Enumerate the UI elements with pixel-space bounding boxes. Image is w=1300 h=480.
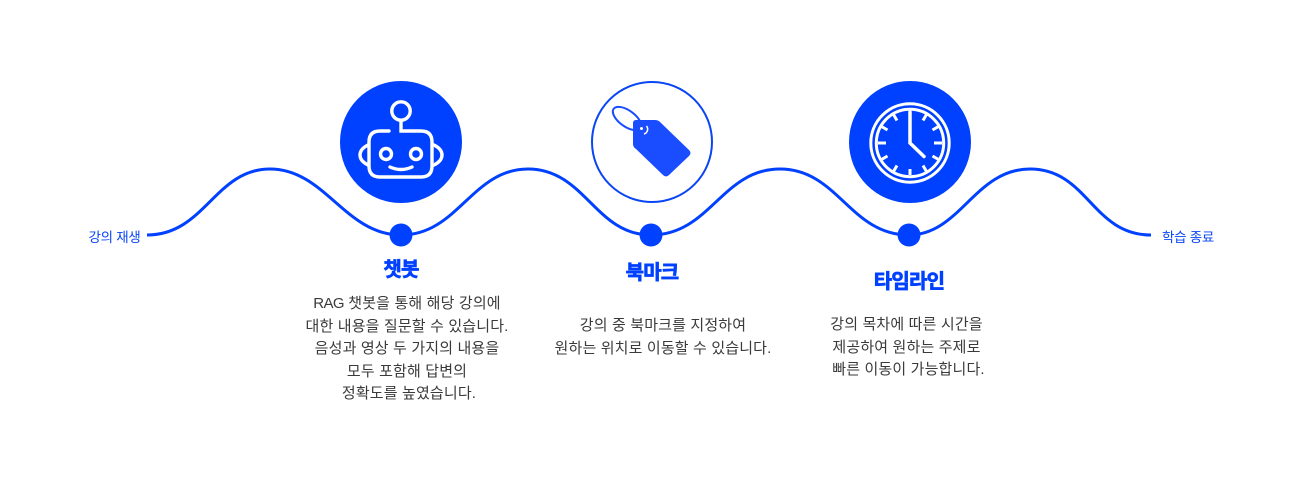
text: bookmark description: 원하는 위치로 이동할 수 있습니다.	[555, 340, 771, 356]
icon: price tag	[592, 82, 712, 202]
marker: bookmark	[640, 224, 662, 246]
heading: bookmark: 북마크	[626, 262, 678, 284]
text: chatbot description: 대한 내용을 질문할 수 있습니다.	[306, 318, 508, 334]
text: chatbot description: 모두 포함해 답변의	[347, 362, 467, 380]
text: chatbot description: RAG 챗봇을 통해 해당 강의에	[313, 295, 501, 312]
text: timeline description	[830, 316, 985, 378]
text: bookmark description: 강의 중 북마크를 지정하여	[580, 317, 746, 334]
text: timeline description: 제공하여 원하는 주제로	[832, 338, 981, 356]
label: end: 학습 종료	[1162, 230, 1214, 245]
label: start: 강의 재생	[89, 230, 140, 245]
text: chatbot description: 음성과 영상 두 가지의 내용을	[315, 340, 499, 357]
heading: chatbot: 챗봇	[383, 259, 419, 281]
timeline wave	[147, 169, 1151, 235]
marker: timeline	[898, 224, 920, 246]
text: timeline description: 강의 목차에 따른 시간을	[830, 316, 983, 333]
text: bookmark description	[555, 317, 771, 356]
text: timeline description: 빠른 이동이 가능합니다.	[832, 361, 985, 378]
marker: chatbot	[390, 224, 412, 246]
icon: robot	[340, 81, 462, 203]
heading: timeline: 타임라인	[874, 271, 944, 293]
icon: clock	[849, 81, 971, 203]
text: chatbot description	[306, 295, 508, 402]
text: chatbot description: 정확도를 높였습니다.	[342, 385, 476, 402]
